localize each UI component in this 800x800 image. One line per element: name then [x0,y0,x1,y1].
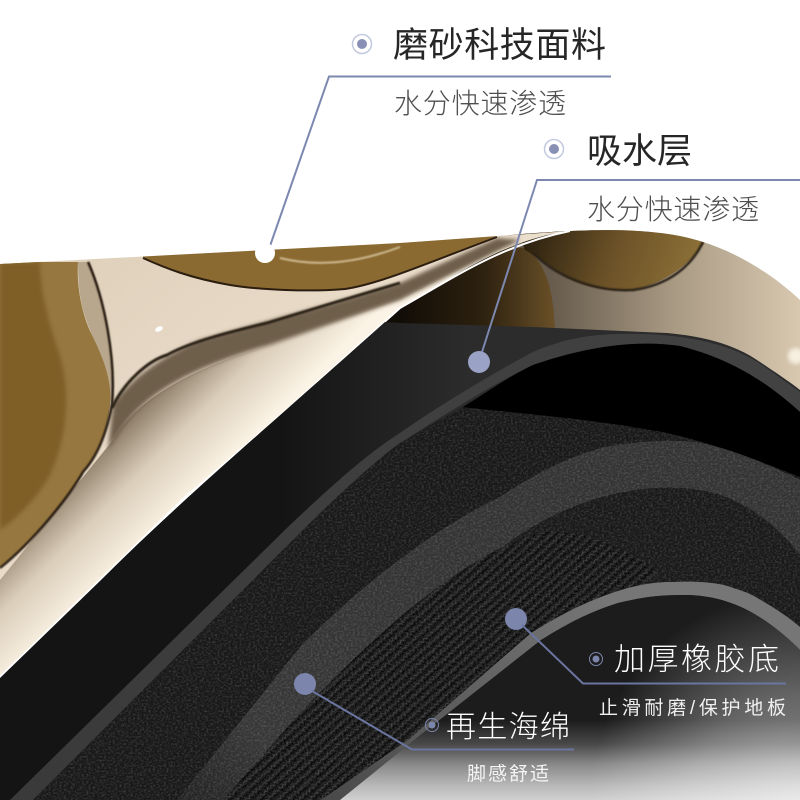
heading: 磨砂科技面料 [393,26,606,65]
sparkle highlights [155,326,163,332]
fold dark curve [112,283,400,408]
left brown droplet rim [0,262,110,567]
upper droplet outline [143,237,497,290]
layer: dark inner foam [505,487,800,660]
cream surface right [500,230,800,390]
upper brown droplet [520,230,704,290]
light floor glow at right [614,610,800,800]
leader line [312,691,574,750]
fold shadow [108,238,520,450]
area under rubber sole [340,595,800,800]
cavity shadow under layer [463,344,800,490]
heading: 再生海绵 [446,711,570,744]
description: 止滑耐磨/保护地板 [599,697,786,719]
dark underside fading to light floor [340,595,800,800]
fold and droplet dark line [0,262,113,568]
icon: target bullet [590,652,602,666]
white anchor dot [255,243,275,263]
anchor dot [468,351,490,373]
leader line [522,625,786,684]
anchor dot [505,608,527,630]
callout: frosted fabric [255,26,611,263]
left droplet sliver [78,262,113,405]
icon: target bullet [544,140,564,158]
foam texture [0,400,800,800]
callout: absorbent layer [468,132,800,373]
layer: mesh fabric [223,532,660,800]
description: 水分快速渗透 [587,194,759,225]
white edge line of top fabric [0,231,570,677]
layer: recycled foam lighter section [177,441,800,800]
photo: water droplets right of fold [386,230,800,390]
layer: recycled foam outer [33,407,800,800]
icon: target bullet [426,718,438,732]
callout: thick rubber sole [505,608,786,719]
bright reflection [788,348,800,364]
layer: rubber sole band [321,582,800,800]
photo: cream surface and droplets left of fold [0,230,580,680]
description: 脚感舒适 [467,763,549,785]
lower cream highlight [0,245,515,676]
heading: 吸水层 [587,132,692,171]
droplet highlight [280,247,400,263]
upper brown droplet [143,236,497,290]
layer: black water-absorbing layer [0,322,800,800]
cream base [0,231,565,580]
leader line [270,76,611,246]
dark brown droplet [386,247,555,328]
layer edge band [10,334,800,800]
description: 水分快速渗透 [394,88,566,119]
callout: recycled sponge [294,673,574,785]
leader line [482,180,800,352]
left brown droplet core [0,262,66,530]
heading: 加厚橡胶底 [614,642,779,677]
icon: target bullet [352,34,372,54]
droplet outline [533,242,703,290]
anchor dot [294,673,316,695]
